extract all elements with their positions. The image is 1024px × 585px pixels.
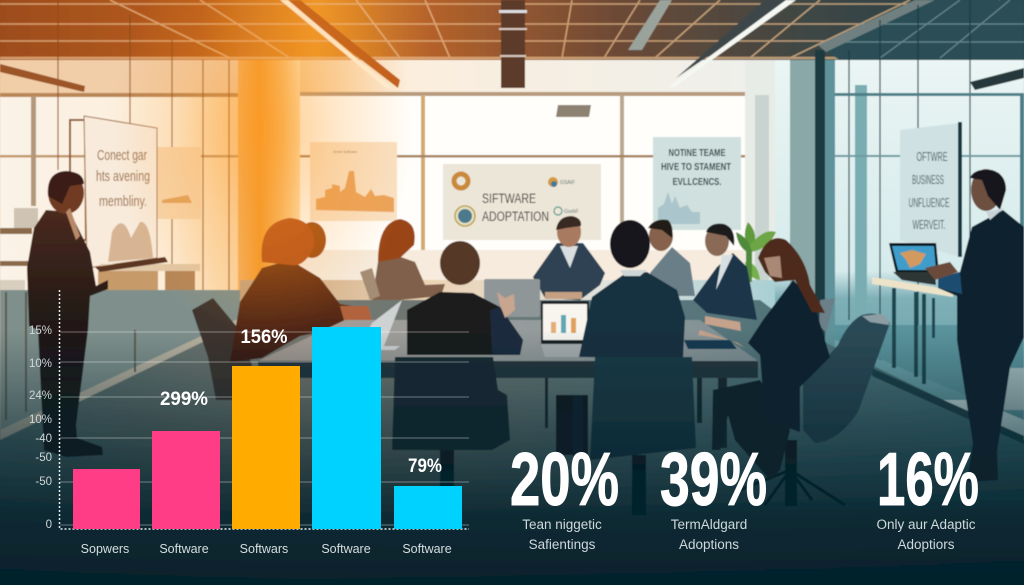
left office furniture — [0, 208, 200, 333]
plant — [736, 222, 776, 282]
stat: 20%: Tean niggetic — [522, 517, 602, 532]
stat: 16%: Only aur Adaptic — [876, 517, 976, 532]
y axis labels: -50 — [35, 452, 52, 464]
right poster: WERVEIT. — [912, 217, 946, 232]
left poster: hts avening — [96, 168, 150, 185]
stat: 39%: Adoptions — [679, 537, 739, 552]
left poster behind — [157, 147, 201, 219]
chair: back, centre — [573, 357, 696, 515]
y axis labels: 15% — [29, 325, 52, 337]
tablet on table — [684, 340, 737, 349]
standing desk, right — [872, 277, 953, 384]
chair: right with arm — [740, 314, 890, 506]
laptop: back silver — [484, 279, 540, 317]
icon: small logos — [548, 177, 579, 215]
y axis labels: 10% — [29, 414, 52, 426]
laptop: silver, left of table — [358, 300, 402, 350]
conference table — [258, 320, 758, 448]
chair: left — [192, 298, 252, 400]
left poster: membliny. — [99, 193, 147, 210]
y axis labels: -50 — [35, 476, 52, 488]
stat: 16%: Adoptiors — [897, 537, 955, 552]
chair: right small back — [819, 298, 835, 333]
stat: 39%: 39% — [660, 437, 767, 521]
y axis labels: 10% — [29, 358, 52, 370]
poster: software adoption — [443, 164, 601, 240]
right poster: BUSINESS — [912, 172, 944, 187]
stat: 20%: 20% — [510, 437, 619, 521]
icon: small logos: GSAIF — [560, 180, 575, 186]
left hanging lamp — [0, 64, 85, 92]
right poster — [900, 122, 962, 257]
person: man in grey, back right — [648, 220, 695, 296]
bar category labels: Software — [402, 542, 452, 556]
amber pillar — [238, 60, 300, 305]
ceiling light fixture: centre duct — [499, 0, 527, 88]
bar 5 — [394, 486, 462, 529]
laptop: world map — [889, 243, 939, 285]
icon: donut logo — [454, 174, 468, 188]
bar value labels: 299% — [160, 388, 208, 410]
bar category labels — [81, 542, 452, 556]
icon: round logo — [455, 206, 475, 226]
person: right standing man — [925, 169, 1024, 482]
y axis labels — [29, 325, 52, 531]
bar 4 — [312, 327, 381, 529]
person: man facing, back of table — [533, 216, 605, 300]
laptop: with chart — [541, 301, 592, 357]
right wall base — [835, 325, 1024, 444]
bar value labels — [160, 326, 442, 477]
ceiling light fixture: right — [668, 0, 796, 87]
poster: notice: HIVE TO STAMENT — [661, 161, 731, 173]
poster title: ADOPTATION — [482, 209, 549, 224]
right glass wall — [775, 0, 1024, 400]
poster: notice: EVLLCENCS. — [672, 176, 722, 188]
chart grid lines — [60, 332, 469, 525]
poster: notice — [653, 137, 741, 230]
poster: city chart — [310, 142, 397, 221]
bar category labels: Sopwers — [81, 542, 129, 556]
bar 2 — [152, 431, 220, 529]
poster title — [482, 191, 549, 224]
ceiling — [0, 0, 1024, 60]
y axis labels: 0 — [46, 519, 52, 531]
bar 1 — [73, 469, 140, 529]
left glass wall — [0, 0, 240, 300]
poster: notice: NOTINE TEAME — [668, 147, 726, 159]
bar value labels: 79% — [408, 455, 442, 477]
stat: 20% — [510, 437, 619, 552]
person: back-facing man, centre — [556, 220, 685, 455]
lower dark gradient — [0, 330, 1024, 585]
person: woman in dark suit — [698, 238, 830, 480]
chair: back, left — [392, 357, 510, 500]
stat: 39%: TermAldgard — [671, 517, 747, 532]
stat: 20%: Safientings — [529, 537, 596, 552]
bar category labels: Software — [321, 542, 371, 556]
chair small back — [360, 268, 380, 300]
floor — [0, 300, 1024, 585]
person: back-facing man, left of table — [407, 241, 523, 355]
warm light glow — [112, 0, 412, 340]
poster: city chart: Smart Software — [333, 150, 357, 154]
person: woman with long hair, left — [230, 218, 372, 362]
stat: 16%: 16% — [877, 437, 979, 521]
ceiling light fixture: panel — [628, 0, 672, 50]
icon: small logos: GsxhF — [564, 209, 579, 215]
bar chart — [29, 290, 469, 556]
back floor strip — [240, 280, 775, 325]
left wall base — [0, 290, 240, 440]
right poster: OFTWRE — [916, 149, 948, 164]
central window wall — [300, 60, 775, 320]
bar category labels: Softwars — [240, 542, 288, 556]
stat: 39% — [660, 437, 767, 552]
right poster: UNFLUENCE — [908, 195, 950, 210]
y axis labels: -40 — [35, 433, 52, 445]
person: left standing presenter — [27, 171, 108, 457]
ceiling light fixture: left — [280, 0, 400, 88]
chart axis — [60, 290, 469, 529]
left poster — [70, 116, 157, 268]
stat: 16% — [876, 437, 979, 552]
bar 3 — [232, 366, 300, 529]
y axis labels: 24% — [29, 390, 52, 402]
bar category labels: Software — [159, 542, 209, 556]
ceiling vent — [556, 105, 591, 117]
person: woman, centre left — [372, 219, 445, 300]
bar value labels: 156% — [240, 326, 288, 348]
person: man with glasses — [693, 224, 757, 320]
left poster: Conect gar — [97, 147, 147, 164]
poster title: SIFTWARE — [482, 191, 536, 206]
